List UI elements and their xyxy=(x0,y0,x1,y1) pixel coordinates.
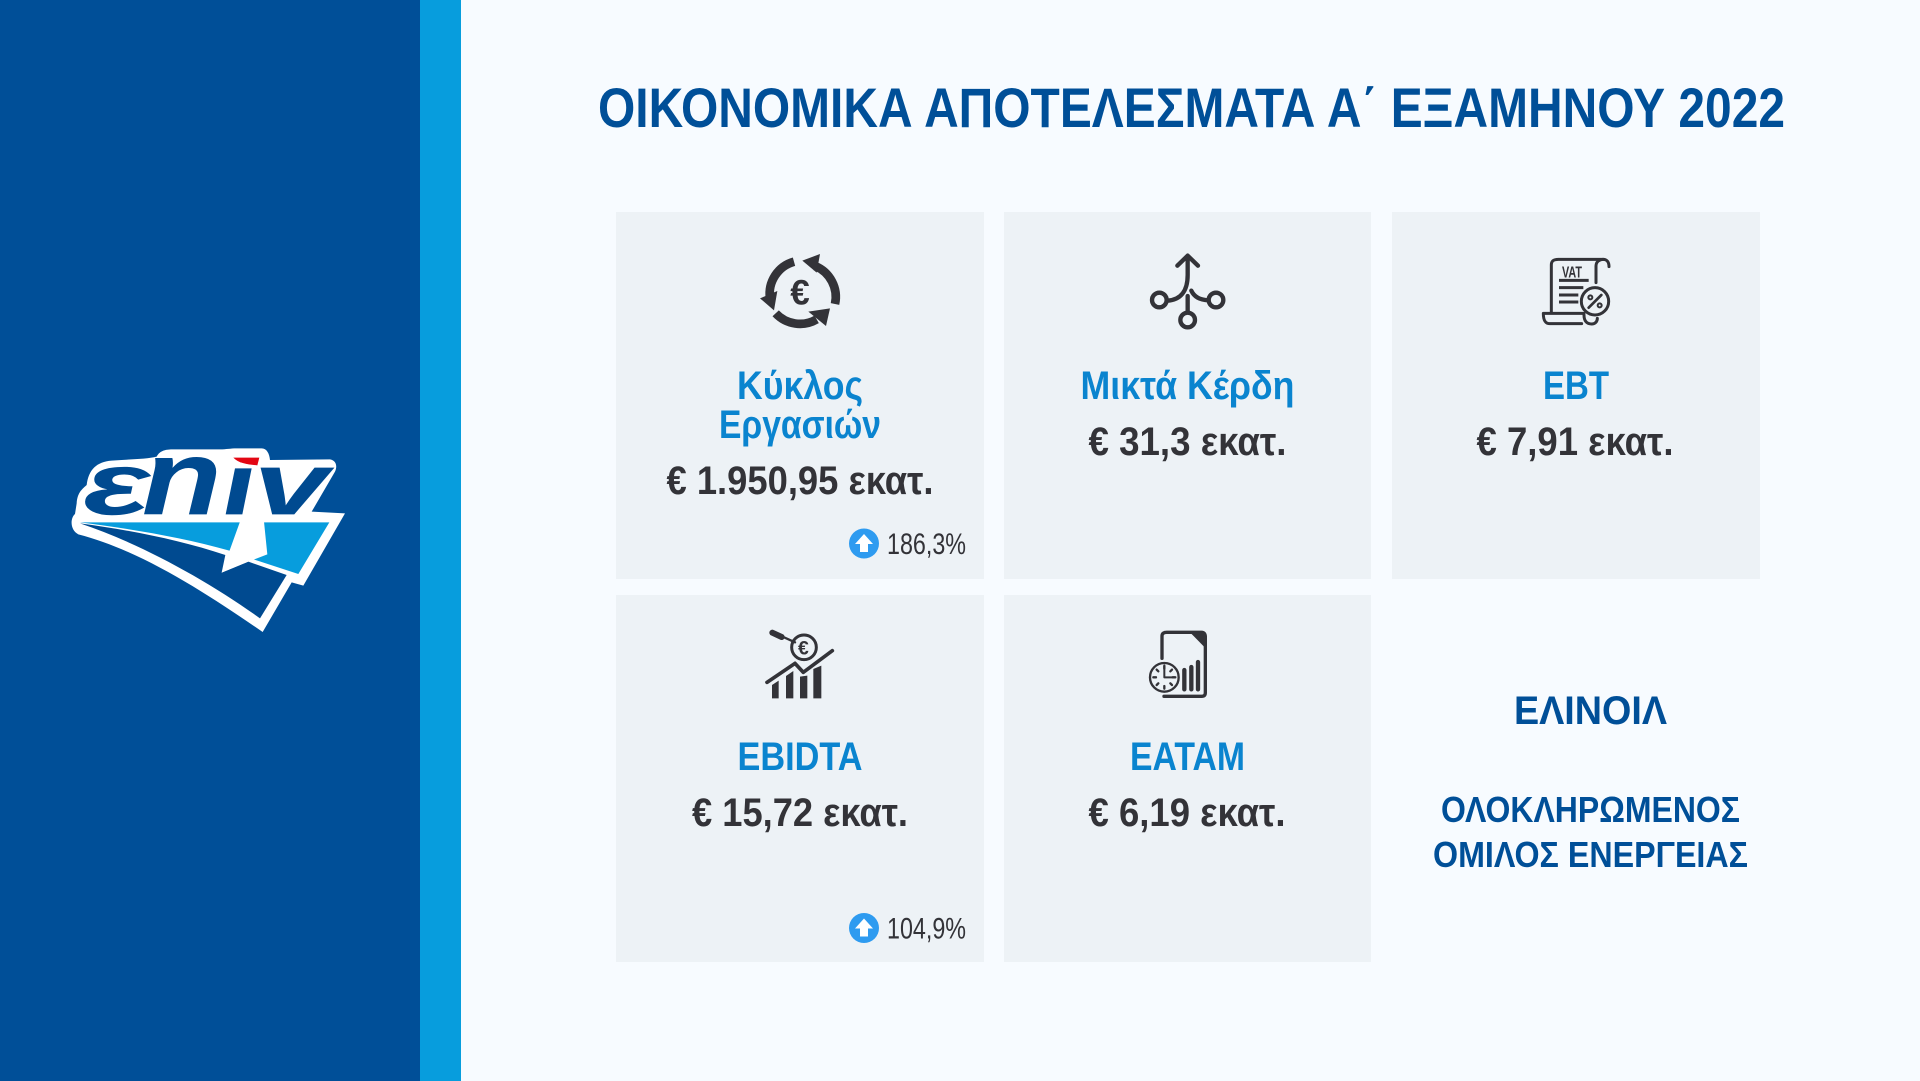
icon: growth chart with magnifier: € xyxy=(798,638,809,659)
panel: light blue sidebar stripe xyxy=(420,0,461,1081)
icon: euro cycle xyxy=(760,254,836,326)
tagline line 2: ΟΜΙΛΟΣ ΕΝΕΡΓΕΙΑΣ xyxy=(1433,834,1748,875)
logo: v xyxy=(253,434,336,533)
badge: increase 104,9% xyxy=(849,912,966,946)
panel: Κύκλος Εργασιών xyxy=(616,212,984,579)
value: € 1.950,95 εκατ. xyxy=(666,459,934,503)
label: Μικτά Κέρδη xyxy=(1080,364,1294,408)
panel: EBIDTA xyxy=(616,595,984,962)
label: EBIDTA xyxy=(738,735,862,779)
value: € 31,3 εκατ. xyxy=(1088,420,1286,464)
panel: EATAM xyxy=(1004,595,1371,962)
badge: increase 104,9%: 104,9% xyxy=(887,912,966,946)
badge: increase 186,3%: 186,3% xyxy=(887,528,966,561)
panel: EBT xyxy=(1392,212,1760,579)
logo: η xyxy=(142,417,222,537)
panel: Μικτά Κέρδη xyxy=(1004,212,1371,579)
text block: company tagline xyxy=(1433,689,1748,875)
company name: ΕΛΙΝΟΙΛ xyxy=(1514,689,1667,733)
label: EATAM xyxy=(1130,735,1245,779)
icon: growth chart with magnifier xyxy=(767,633,832,698)
label: Εργασιών: Εργασιών xyxy=(719,403,881,447)
value: € 6,19 εκατ. xyxy=(1088,791,1286,835)
icon: merging arrow xyxy=(1152,256,1223,327)
icon: VAT document xyxy=(1543,259,1609,324)
icon: document with clock and bars xyxy=(1150,632,1207,696)
value: € 7,91 εκατ. xyxy=(1476,420,1674,464)
badge: increase 186,3% xyxy=(849,528,966,561)
icon: VAT document: VAT xyxy=(1562,264,1582,281)
icon: euro cycle: € xyxy=(790,273,810,312)
logo: ε xyxy=(83,434,153,533)
label: EBT xyxy=(1543,364,1609,408)
tagline line 1: ΟΛΟΚΛΗΡΩΜΕΝΟΣ xyxy=(1441,789,1740,830)
label: Κύκλος: Κύκλος xyxy=(737,364,863,408)
panel: dark blue sidebar xyxy=(0,0,420,1081)
logo xyxy=(72,448,345,632)
value: € 15,72 εκατ. xyxy=(692,791,908,835)
